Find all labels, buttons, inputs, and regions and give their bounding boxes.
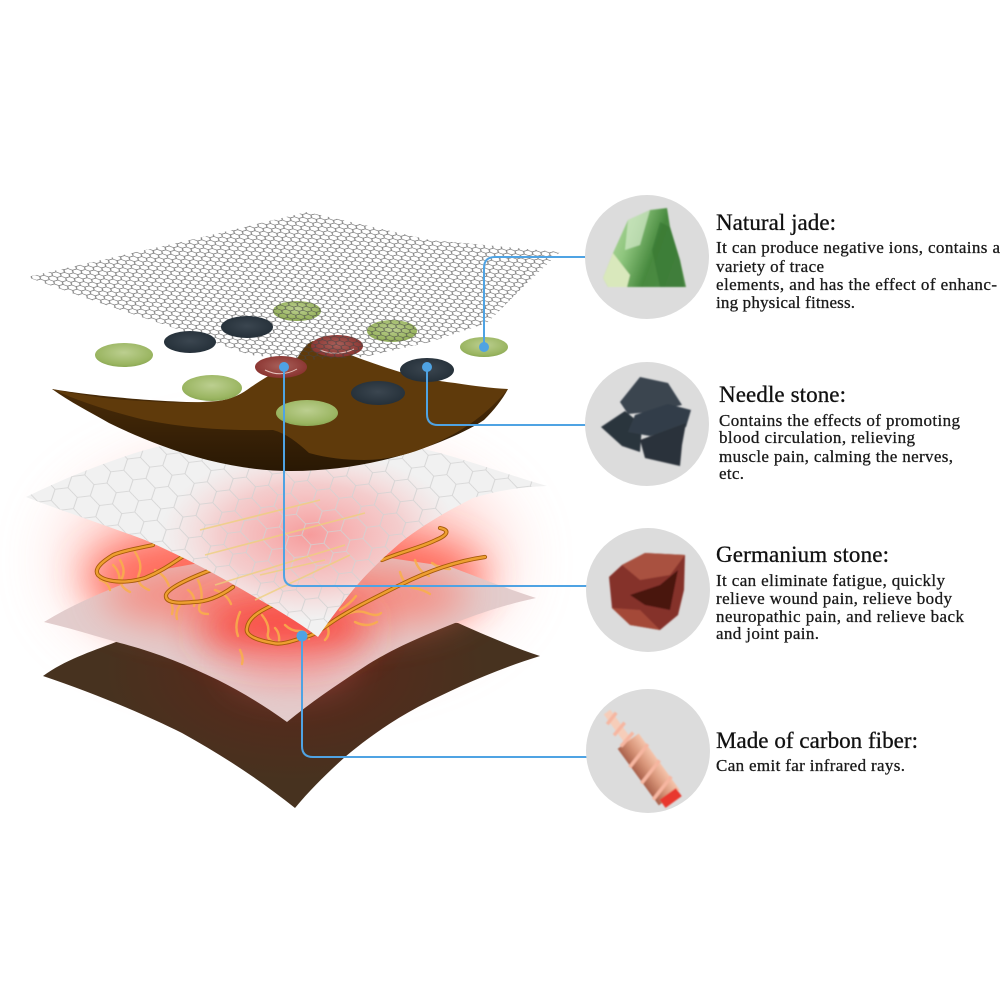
text: natural jade: ing physical fitness.: [716, 293, 855, 312]
text: germanium stone: It can eliminate fatigue, quickly: [716, 571, 946, 590]
coil wire: [97, 528, 485, 644]
text: carbon fiber: Can emit far infrared rays.: [716, 756, 905, 775]
text: natural jade: [716, 210, 1000, 312]
stone: jade green, mesh covered: [273, 301, 417, 342]
text: germanium stone: neuropathic pain, and relieve back: [716, 607, 964, 626]
stones: jade green discs: [95, 337, 508, 426]
leader line: natural jade: [480, 257, 586, 351]
text: carbon fiber: [716, 728, 918, 775]
text: needle stone: blood circulation, relieving: [719, 428, 916, 447]
text: germanium stone: relieve wound pain, relieve body: [716, 589, 952, 608]
icon: germanium stone: [586, 528, 710, 652]
text: needle stone: muscle pain, calming the nerves,: [719, 447, 953, 466]
icon: needle stone: [585, 362, 709, 486]
stones: needle stone dark discs: [164, 316, 454, 405]
pink insulation layer: [44, 545, 536, 722]
text: germanium stone: [716, 542, 964, 643]
coil seen through fabric: [200, 500, 365, 600]
text: carbon fiber: Made of carbon fiber:: [716, 728, 918, 753]
stone: germanium red, upper: [311, 335, 363, 357]
text: needle stone: etc.: [719, 464, 744, 483]
icon: carbon fiber heater: [586, 689, 710, 813]
stones above the mesh: [95, 316, 508, 426]
text: needle stone: Contains the effects of promoting: [719, 411, 960, 430]
text: needle stone: Needle stone:: [719, 382, 846, 407]
text: natural jade: It can produce negative ions, contains a: [716, 238, 1000, 257]
text: natural jade: elements, and has the effect of enhanc-: [716, 275, 997, 294]
text: natural jade: variety of trace: [716, 257, 824, 276]
text: germanium stone: and joint pain.: [716, 624, 819, 643]
stone: germanium red, lower: [255, 356, 307, 378]
leader line: needle stone: [423, 363, 587, 425]
carbon fiber heating coil: [97, 528, 485, 664]
hexagon metal mesh: [27, 212, 560, 360]
text: needle stone: [719, 382, 960, 483]
white honeycomb fabric layer: [26, 437, 547, 637]
leader line: germanium stone: [280, 363, 587, 586]
flames: [100, 552, 450, 664]
text: germanium stone: Germanium stone:: [716, 542, 889, 567]
leader line: carbon fiber: [298, 632, 587, 757]
bottom layer: dark brown backing: [43, 610, 540, 808]
red heat glow: [70, 460, 500, 660]
text: natural jade: Natural jade:: [716, 210, 836, 235]
icon: natural jade: [585, 195, 709, 319]
brown felt layer: [52, 341, 508, 471]
stones below the mesh: [273, 301, 417, 357]
heat glow on pink layer: [100, 557, 470, 687]
